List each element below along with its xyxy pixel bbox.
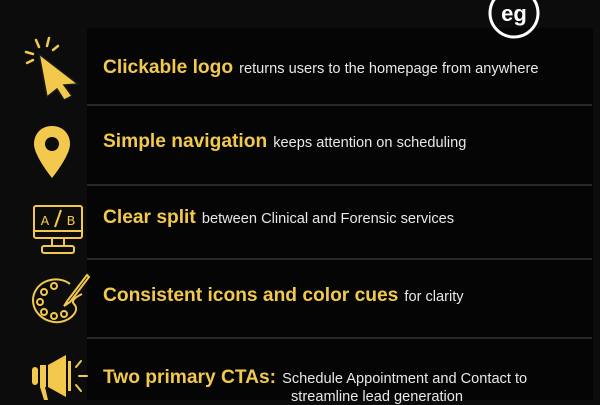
row 2 text: Simple navigation keeps attention on scheduling <box>103 131 466 152</box>
row 3 text: Clear split between Clinical and Forensic services <box>103 207 454 228</box>
row 4 text: Consistent icons and color cues for clarity <box>103 285 464 306</box>
icon: A/B monitor: B <box>67 214 75 230</box>
icon: megaphone <box>32 355 88 400</box>
icon: palette <box>32 274 90 324</box>
row 1 text: Clickable logo returns users to the homepage from anywhere <box>103 57 538 78</box>
icon: A/B monitor <box>33 205 83 254</box>
row 5 text: Two primary CTAs: Schedule Appointment and Contact to <box>103 367 527 388</box>
row 5 text: streamline lead generation <box>291 389 463 405</box>
logo: eg <box>501 1 527 26</box>
icon: A/B monitor: A <box>41 214 50 230</box>
panel: background of rows <box>87 28 593 400</box>
logo <box>488 0 540 38</box>
icon: cursor click <box>24 36 80 100</box>
icon: location pin <box>34 126 70 178</box>
row 5 text <box>103 367 527 405</box>
